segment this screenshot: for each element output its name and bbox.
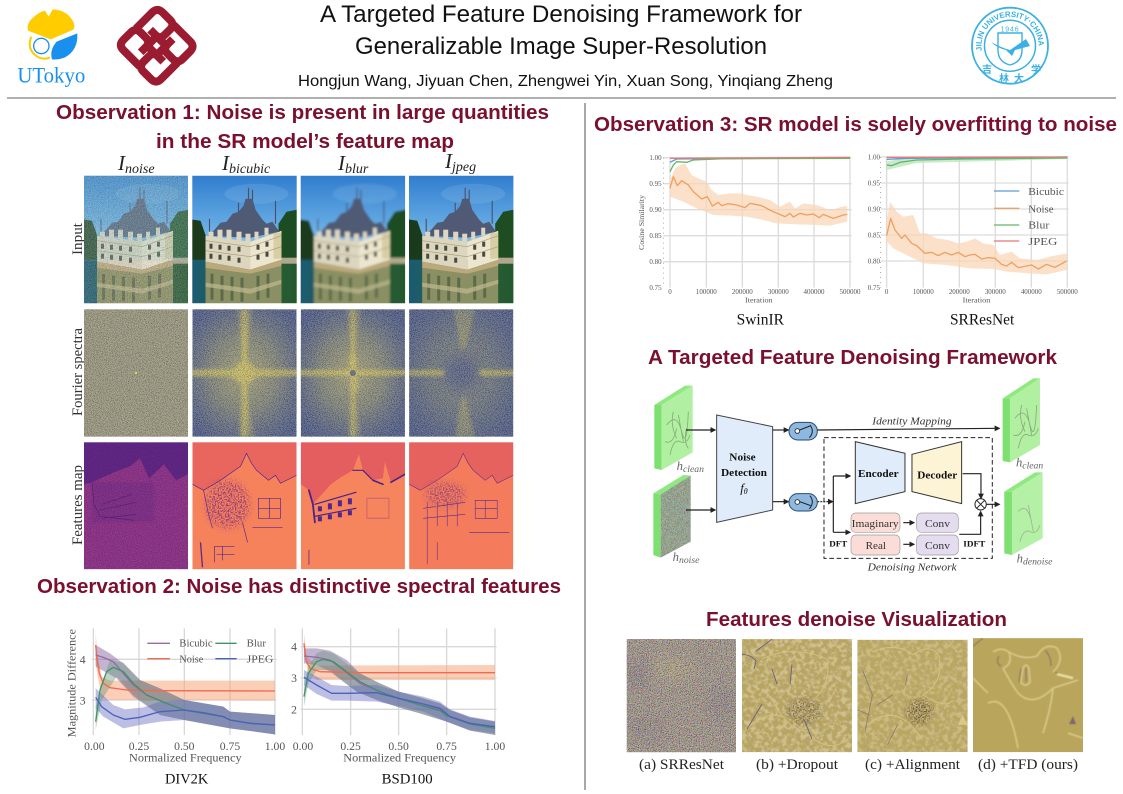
- heading: observation 2: Observation 2: Noise has distinctive spectral features: [37, 576, 561, 598]
- image: feature map noise: [84, 442, 188, 570]
- box: conv upper: Conv: [925, 518, 950, 530]
- legend: JPEG: [1028, 236, 1057, 248]
- legend: Blur: [247, 639, 266, 650]
- title: A Targeted Feature Denoising Framework for: [320, 1, 802, 28]
- chart: cosine similarity SwinIR: 300000: [768, 288, 789, 296]
- image: feature map bicubic: [192, 442, 296, 570]
- noise band: [96, 633, 275, 701]
- chart: magnitude difference BSD100: 2: [291, 703, 297, 716]
- captions: (c) +Alignment: [865, 757, 961, 773]
- decoder: Decoder: [917, 470, 958, 481]
- image: spectrum bicubic: [192, 309, 297, 437]
- image: spectrum blur: [300, 309, 406, 437]
- feature block: h clean input: [654, 386, 693, 470]
- legend: Blur: [1028, 220, 1050, 232]
- image: spectrum jpeg: [409, 309, 514, 437]
- chart: magnitude difference DIV2K: Magnitude Difference: [66, 629, 79, 737]
- heading: framework: A Targeted Feature Denoising Framework: [648, 347, 1058, 369]
- chart: magnitude difference BSD100: 3: [291, 672, 297, 685]
- chart: cosine similarity SRResNet: 200000: [949, 288, 970, 296]
- switch: lower: [789, 494, 817, 511]
- logo: PolyU: [118, 7, 196, 85]
- noise detection block: θ: [744, 487, 748, 496]
- image: alignment features: [857, 640, 968, 752]
- chart: cosine similarity SRResNet: 0: [885, 288, 889, 296]
- box: real: Real: [866, 540, 886, 552]
- logo: UTokyo: UTokyo: [17, 62, 85, 87]
- captions: (b) +Dropout: [756, 757, 839, 773]
- chart: cosine similarity SwinIR: 0.95: [649, 180, 662, 188]
- chart: magnitude difference BSD100: 0.00: [293, 740, 313, 753]
- chart: cosine similarity SRResNet: 300000: [985, 288, 1006, 296]
- heading: observation 1: Observation 1: Noise is present in large quantities: [56, 102, 549, 124]
- chart: magnitude difference DIV2K: 0.75: [220, 740, 240, 753]
- chart: cosine similarity SwinIR: 0.90: [649, 206, 662, 214]
- chart: cosine similarity SwinIR: Iteration: [745, 296, 773, 304]
- column headers: jpeg: [450, 160, 476, 175]
- column headers: blur: [345, 162, 369, 177]
- chart: magnitude difference BSD100: BSD100: [382, 771, 433, 787]
- legend: JPEG: [247, 655, 274, 666]
- column headers: I: [338, 151, 345, 175]
- jpeg band: [96, 688, 275, 734]
- diagram: denoising framework: [653, 378, 1053, 574]
- logo: Jilin University: 大: [1014, 72, 1024, 85]
- chart: cosine similarity SwinIR: 0.80: [649, 258, 662, 266]
- column headers: bicubic: [229, 162, 271, 177]
- chart: magnitude difference DIV2K: Normalized Frequency: [129, 752, 242, 765]
- chart: cosine similarity SwinIR: 1.00: [649, 154, 662, 162]
- image: input bicubic: [192, 176, 297, 304]
- box: conv lower: [917, 535, 958, 555]
- captions: (a) SRResNet: [639, 757, 725, 773]
- heading: observation 1: in the SR model’s feature map: [156, 131, 454, 153]
- logo: Jilin University: JILIN UNIVERSITY·CHINA: [976, 12, 1044, 51]
- chart: cosine similarity SwinIR: SwinIR: [737, 311, 785, 328]
- legend: Noise: [1028, 203, 1054, 215]
- chart: cosine similarity SwinIR: 0.85: [649, 232, 662, 240]
- image: spectrum noise: [84, 309, 188, 437]
- legend: [994, 186, 1064, 248]
- chart: magnitude difference DIV2K: 1.00: [265, 740, 285, 753]
- chart: cosine similarity SRResNet: 0.85: [868, 231, 880, 239]
- chart: magnitude difference BSD100: [291, 628, 505, 787]
- encoder: Encoder: [858, 469, 899, 480]
- feature block: h clean output: [1003, 378, 1040, 462]
- box: imaginary: Imaginary: [852, 518, 899, 530]
- chart: cosine similarity SRResNet: 0.75: [868, 284, 880, 292]
- chart: cosine similarity SRResNet: Iteration: [963, 296, 991, 304]
- chart: magnitude difference BSD100: 0.25: [340, 740, 361, 753]
- switch: upper: [789, 422, 817, 440]
- logo: UTokyo: [17, 9, 85, 87]
- column headers: noise: [125, 162, 155, 177]
- logo: Jilin University: 吉: [982, 63, 992, 76]
- chart: magnitude difference DIV2K: 4: [80, 654, 86, 667]
- chart: cosine similarity SwinIR: [638, 154, 861, 328]
- heading: observation 1: [56, 102, 549, 153]
- row labels: Features map: [70, 465, 86, 545]
- chart: cosine similarity SRResNet: 0.90: [868, 205, 880, 213]
- logo: Jilin University: 1946: [1001, 26, 1019, 34]
- noise detection block: Noise: [729, 453, 756, 464]
- denoising network box: [824, 438, 992, 558]
- feature labels: h: [677, 459, 683, 473]
- chart: cosine similarity SwinIR: Cosine Similarity: [638, 194, 646, 250]
- column headers: I: [118, 151, 125, 175]
- chart: magnitude difference DIV2K: 0.50: [174, 740, 195, 753]
- chart: cosine similarity SRResNet: 0.80: [868, 257, 880, 265]
- labels: DFT and IDFT: DFT: [829, 540, 848, 549]
- chart: magnitude difference DIV2K: DIV2K: [165, 771, 209, 787]
- decoder: [912, 442, 962, 504]
- chart: magnitude difference BSD100: Normalized Frequency: [343, 752, 456, 765]
- column headers: [117, 149, 476, 177]
- box: real: [851, 535, 900, 555]
- legend: Bicubic: [1028, 186, 1064, 198]
- feature block: h denoise output: [1004, 472, 1043, 555]
- chart: magnitude difference BSD100: 4: [291, 641, 297, 654]
- chart: magnitude difference BSD100: 1.00: [485, 740, 505, 753]
- noise detection block: [717, 415, 773, 522]
- captions: [639, 757, 1078, 773]
- chart: magnitude difference BSD100: 0.75: [436, 740, 457, 753]
- image: feature map jpeg: [409, 442, 514, 570]
- chart: magnitude difference DIV2K: [66, 628, 285, 787]
- chart: cosine similarity SwinIR: 500000: [840, 288, 861, 296]
- chart: cosine similarity SRResNet: 400000: [1021, 288, 1042, 296]
- noise detection block: Detection: [721, 468, 767, 479]
- feature block: h noise input: [653, 475, 691, 558]
- row labels: Input: [70, 223, 86, 255]
- feature labels: denoise: [1023, 557, 1053, 568]
- image: SRResNet noisy features: [626, 639, 736, 752]
- column headers: I: [222, 151, 229, 175]
- chart: cosine similarity SRResNet: 1.00: [868, 153, 880, 161]
- chart: magnitude difference DIV2K: 0.25: [129, 740, 149, 753]
- arrows: [686, 428, 999, 544]
- chart: magnitude difference DIV2K: 3: [80, 694, 86, 707]
- authors: Hongjun Wang, Jiyuan Chen, Zhengwei Yin, Xuan Song, Yinqiang Zheng: [298, 73, 833, 90]
- labels: DFT and IDFT: [829, 540, 986, 549]
- legend: Noise: [179, 655, 204, 666]
- box: imaginary: [851, 513, 900, 532]
- encoder: [855, 442, 905, 504]
- vertical divider: [584, 103, 586, 790]
- feature labels: [673, 456, 1053, 568]
- multiply node: [975, 499, 986, 510]
- feature labels: h: [673, 550, 679, 564]
- label: denoising network: Denoising Network: [866, 563, 957, 574]
- box: conv upper: [917, 513, 958, 532]
- title: [320, 1, 802, 60]
- chart: cosine similarity SwinIR: 100000: [696, 288, 717, 296]
- chart: cosine similarity SwinIR: 0: [668, 288, 672, 296]
- legend: [147, 639, 274, 666]
- heading: observation 3: Observation 3: SR model is solely overfitting to noise: [594, 114, 1117, 136]
- image: input noise: [84, 176, 188, 304]
- chart: magnitude difference BSD100: 0.50: [388, 740, 409, 753]
- title: Generalizable Image Super-Resolution: [355, 33, 767, 60]
- legend: Bicubic: [179, 639, 213, 650]
- row labels: Fourier spectra: [70, 327, 86, 416]
- chart: magnitude difference DIV2K: 0.00: [84, 740, 105, 753]
- chart: cosine similarity SwinIR: 200000: [732, 288, 753, 296]
- labels: DFT and IDFT: IDFT: [963, 540, 986, 549]
- image: input jpeg: [409, 176, 514, 304]
- chart: cosine similarity SRResNet: SRResNet: [950, 311, 1015, 328]
- captions: (d) +TFD (ours): [978, 757, 1078, 773]
- feature labels: h: [1017, 552, 1023, 566]
- feature labels: h: [1016, 456, 1022, 470]
- image: dropout features: [742, 639, 852, 752]
- feature labels: clean: [1022, 461, 1043, 472]
- label: identity mapping: Identity Mapping: [871, 416, 952, 427]
- chart: cosine similarity SwinIR: 400000: [804, 288, 825, 296]
- feature labels: noise: [679, 555, 700, 566]
- row labels: [70, 223, 86, 545]
- chart: cosine similarity SwinIR: 0.75: [649, 284, 662, 292]
- feature labels: clean: [683, 464, 704, 475]
- logo: Jilin University: 林: [999, 72, 1009, 85]
- logo: Jilin University: 学: [1031, 63, 1041, 76]
- column headers: I: [445, 149, 452, 173]
- image: input blur: [300, 176, 406, 304]
- image: TFD features: [973, 638, 1083, 752]
- image: feature map blur: [300, 442, 406, 570]
- bicubic band: [96, 645, 275, 734]
- chart: cosine similarity SRResNet: 100000: [913, 288, 934, 296]
- heading: features denoise visualization: Features denoise Visualization: [706, 609, 1007, 631]
- blur band: [96, 660, 275, 734]
- box: conv lower: Conv: [925, 540, 950, 552]
- chart: cosine similarity SRResNet: 500000: [1057, 288, 1078, 296]
- horizontal divider: [7, 97, 1116, 99]
- noise detection block: f: [740, 481, 744, 495]
- chart: cosine similarity SRResNet: [868, 153, 1078, 328]
- chart: cosine similarity SRResNet: 0.95: [868, 179, 880, 187]
- logo: Jilin University: [971, 6, 1049, 85]
